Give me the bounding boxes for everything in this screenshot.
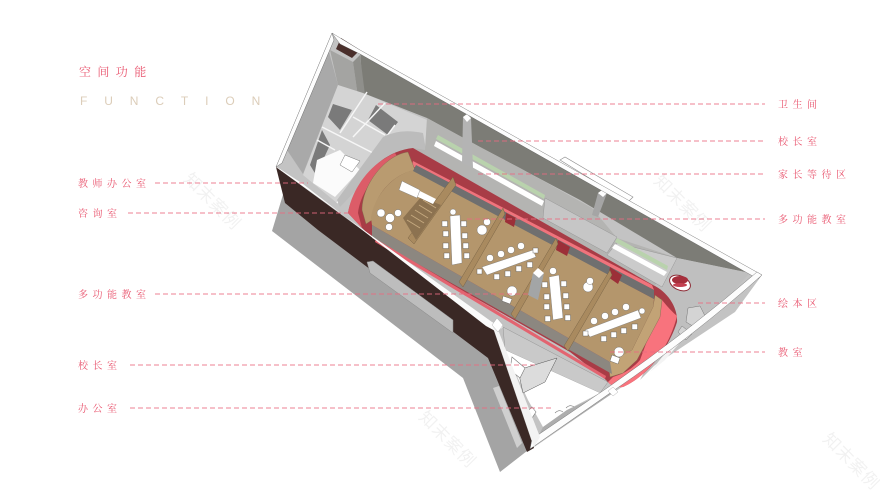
upper wall bbox=[360, 50, 762, 275]
lower office white floor bbox=[505, 350, 600, 427]
lower right wall bbox=[533, 393, 613, 447]
corner pier bbox=[492, 318, 503, 332]
left labels: 咨询室 bbox=[78, 208, 122, 220]
light wall panel two bbox=[607, 243, 677, 287]
lower glass rail bbox=[372, 225, 612, 374]
room two furniture bbox=[442, 209, 490, 265]
pink ring end right bbox=[608, 300, 677, 387]
office floor bbox=[313, 150, 360, 197]
white parapet lower bbox=[493, 322, 540, 447]
room five furniture bbox=[583, 304, 645, 364]
pink ring corner left bbox=[348, 153, 398, 228]
watermarks: 知末案例 bbox=[415, 407, 480, 472]
room three furniture bbox=[477, 242, 538, 304]
white parapet top bbox=[332, 33, 762, 279]
left inner wall bbox=[287, 48, 338, 174]
partition three bbox=[511, 238, 558, 319]
axonometric floor plan bbox=[272, 33, 762, 472]
exterior signage box bbox=[560, 157, 633, 202]
right labels: 家长等待区 bbox=[778, 168, 850, 181]
right labels: 教室 bbox=[778, 346, 807, 359]
picture book furniture bbox=[678, 306, 706, 340]
partition four bbox=[564, 270, 612, 351]
red ring bbox=[348, 148, 677, 387]
left labels: 多功能教室 bbox=[78, 288, 150, 301]
pier on rear wall bbox=[353, 55, 365, 97]
teacher office desk bbox=[340, 155, 360, 172]
pink inner strip bbox=[412, 161, 654, 290]
rear wall chunk bbox=[330, 50, 358, 97]
partition two bbox=[459, 208, 505, 287]
wood end wall bbox=[608, 295, 662, 377]
red window panels bbox=[505, 213, 622, 284]
glass office partition bbox=[518, 358, 557, 393]
room one furniture bbox=[377, 181, 420, 230]
top timber detail bbox=[336, 38, 360, 58]
corner pier right bbox=[608, 387, 618, 396]
white sill two bbox=[612, 244, 667, 276]
subtitle: FUNCTION: FUNCTION bbox=[80, 94, 277, 108]
dark washroom recesses bbox=[310, 104, 398, 175]
red circular seating bbox=[667, 272, 693, 294]
title: 空间功能 bbox=[79, 64, 153, 79]
left labels: 校长室 bbox=[78, 359, 122, 372]
white floor by picture book corner bbox=[650, 325, 695, 372]
right end floor bbox=[640, 258, 750, 380]
watermarks: 知末案例 bbox=[650, 171, 715, 236]
white parapet right bbox=[530, 272, 762, 449]
lower office wall bbox=[503, 327, 608, 393]
ground shadow bbox=[272, 170, 527, 472]
curved corridor wall bbox=[337, 131, 426, 207]
partition one bbox=[408, 177, 456, 244]
timber classroom floor bbox=[371, 170, 654, 362]
washroom block bbox=[303, 85, 427, 203]
washroom partitions bbox=[317, 92, 395, 203]
right labels: 校长室 bbox=[778, 135, 822, 148]
corridor slab bbox=[413, 118, 677, 287]
light wall panel one bbox=[543, 198, 617, 253]
room four furniture bbox=[528, 268, 594, 322]
green window one bbox=[436, 135, 545, 199]
dark timber facade bbox=[276, 167, 534, 452]
white parapet front bbox=[276, 167, 503, 332]
column one bbox=[462, 117, 473, 168]
watermarks bbox=[180, 169, 880, 494]
column two cap bbox=[598, 190, 607, 197]
office furniture bbox=[510, 357, 574, 418]
island wood wall bbox=[362, 152, 415, 224]
callout lines bbox=[128, 104, 765, 408]
right labels: 多功能教室 bbox=[778, 213, 850, 226]
white parapet left bbox=[276, 33, 334, 167]
left labels bbox=[78, 177, 150, 415]
watermarks: 知末案例 bbox=[180, 169, 245, 234]
top glass windows bbox=[413, 165, 654, 299]
white sill one bbox=[434, 141, 544, 206]
column one cap bbox=[463, 114, 471, 122]
lower pink rail line bbox=[375, 239, 606, 379]
column two bbox=[592, 193, 607, 217]
right labels: 绘本区 bbox=[778, 297, 822, 310]
facade planter box bbox=[367, 261, 453, 333]
building base floor bbox=[276, 33, 762, 450]
zebra crossing bbox=[493, 386, 522, 448]
right labels: 卫生间 bbox=[778, 98, 822, 111]
left labels: 教师办公室 bbox=[78, 177, 150, 190]
staircase bbox=[403, 190, 441, 240]
left labels: 办公室 bbox=[78, 402, 122, 415]
green window two bbox=[615, 238, 668, 270]
right labels bbox=[778, 98, 850, 359]
